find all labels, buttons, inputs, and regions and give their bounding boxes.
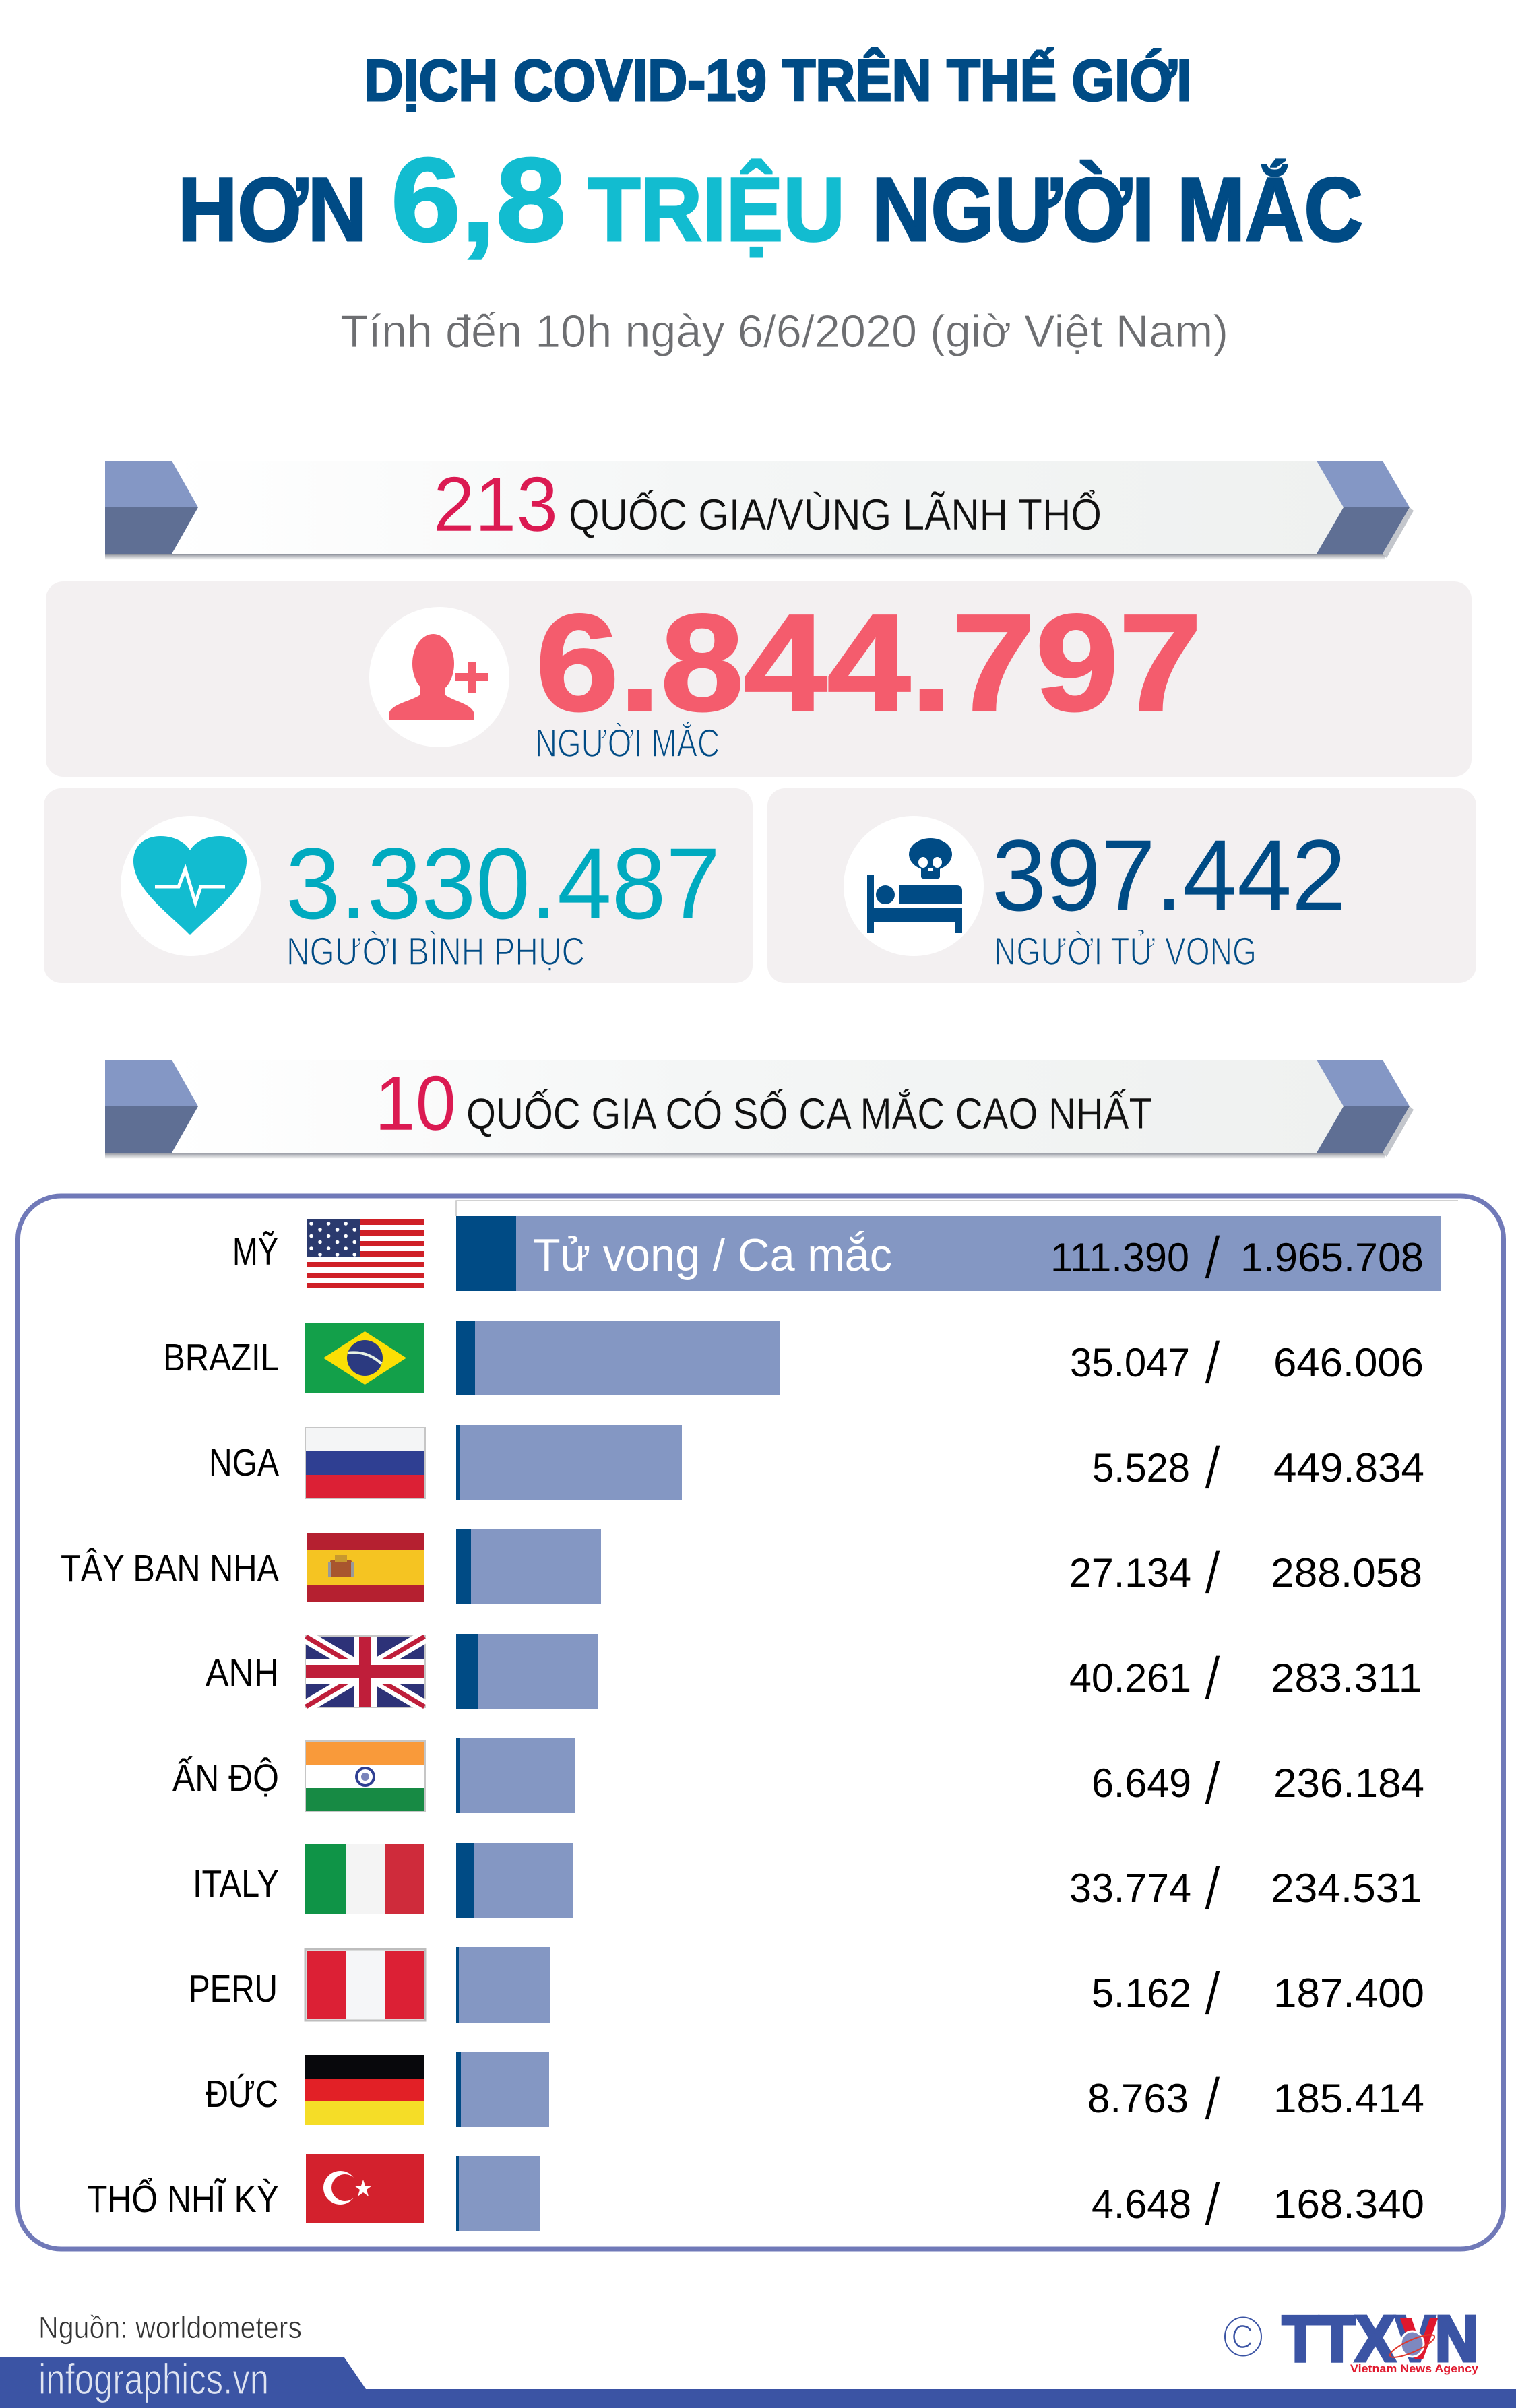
values: Turkey <box>1092 2171 1424 2238</box>
headline: 6,8 <box>391 134 566 266</box>
row: Peru: PERU <box>189 1967 278 2010</box>
values: Spain: 288.058 <box>1271 1550 1422 1595</box>
panel: deaths <box>767 788 1476 983</box>
values: Italy: 234.531 <box>1271 1866 1422 1911</box>
panel: cases <box>46 581 1472 777</box>
icon: copyright <box>1225 2318 1261 2355</box>
banner: top 10 countries: QUỐC GIA CÓ SỐ CA MẮC CAO NHẤT <box>466 1089 1152 1138</box>
title: top line: DỊCH COVID-19 TRÊN THẾ GIỚI <box>364 49 1192 113</box>
banner: 213 territories: QUỐC GIA/VÙNG LÃNH THỔ <box>569 490 1102 539</box>
row: Italy: ITALY <box>193 1862 279 1905</box>
values: USA: 111.390 <box>1050 1235 1189 1280</box>
flag: Brazil <box>305 1323 424 1393</box>
values: USA: / <box>1205 1224 1221 1291</box>
bar: Spain <box>456 1529 601 1604</box>
values: Italy: / <box>1205 1855 1221 1922</box>
row: USA <box>232 1216 1441 1291</box>
icon: skull and bed <box>844 816 984 956</box>
values: Peru: / <box>1205 1960 1221 2027</box>
values: Turkey: / <box>1205 2171 1221 2238</box>
row: India: ẤN ĐỘ <box>172 1756 279 1800</box>
row: Russia: NGA <box>209 1441 279 1484</box>
row: Russia <box>209 1425 1424 1501</box>
row: USA: MỸ <box>232 1230 278 1273</box>
row: UK <box>206 1634 1422 1711</box>
logo: TTXVN: TTXVN <box>1282 2303 1478 2375</box>
row: Turkey <box>87 2154 1424 2238</box>
row: Italy <box>193 1843 1422 1922</box>
values: Brazil: / <box>1205 1329 1221 1396</box>
values: Germany: 8.763 <box>1087 2076 1189 2121</box>
headline: NGƯỜI MẮC <box>872 159 1363 260</box>
values: Italy <box>1069 1855 1422 1922</box>
row: India <box>172 1738 1424 1816</box>
row: Brazil <box>163 1321 1424 1396</box>
flag: Russia <box>305 1428 425 1498</box>
values: Brazil: 646.006 <box>1273 1340 1424 1385</box>
number: cases: 6.844.797 <box>536 586 1202 740</box>
values: Germany: / <box>1205 2065 1221 2132</box>
icon: person plus <box>369 607 509 747</box>
values: USA: 1.965.708 <box>1240 1235 1424 1280</box>
number: deaths: 397.442 <box>992 819 1346 932</box>
values: Brazil: 35.047 <box>1070 1340 1190 1385</box>
number: recovered: 3.330.487 <box>286 827 720 940</box>
bar: Peru <box>456 1947 550 2023</box>
panel: recovered <box>44 788 753 983</box>
values: Peru <box>1092 1960 1424 2027</box>
flag: Germany <box>305 2055 424 2125</box>
values: India <box>1092 1750 1424 1816</box>
banner: 213 territories <box>105 461 1414 560</box>
label: deaths: NGƯỜI TỬ VONG <box>994 930 1257 974</box>
panel: top 10 table <box>18 1196 1504 2249</box>
flag: Spain <box>307 1533 424 1602</box>
values: Peru: 187.400 <box>1273 1971 1424 2016</box>
row: Germany: ĐỨC <box>206 2072 278 2116</box>
row: Peru <box>189 1947 1424 2027</box>
values: Russia: 5.528 <box>1092 1445 1190 1490</box>
values: Brazil <box>1070 1329 1424 1396</box>
bar: UK <box>456 1634 598 1709</box>
values: Germany: 185.414 <box>1273 2076 1424 2121</box>
row: Turkey: THỔ NHĨ KỲ <box>87 2177 279 2221</box>
row: Spain <box>61 1529 1422 1606</box>
flag: Peru <box>305 1949 425 2021</box>
legend label: Tử vong / Ca mắc <box>533 1230 892 1281</box>
values: Spain: / <box>1205 1540 1221 1606</box>
label: cases: NGƯỜI MẮC <box>535 722 720 765</box>
banner: top 10 countries <box>105 1060 1414 1159</box>
row: Brazil: BRAZIL <box>163 1336 279 1379</box>
values: USA <box>1050 1224 1424 1291</box>
values: UK: 40.261 <box>1069 1655 1191 1701</box>
row: Germany <box>206 2052 1424 2132</box>
values: Italy: 33.774 <box>1069 1866 1191 1911</box>
values: Russia: / <box>1205 1434 1221 1501</box>
headline: TRIỆU <box>588 160 845 260</box>
label: recovered: NGƯỜI BÌNH PHỤC <box>286 930 585 974</box>
values: India: 236.184 <box>1273 1761 1424 1806</box>
values: India: 6.649 <box>1092 1761 1191 1806</box>
values: Germany <box>1087 2065 1424 2132</box>
bar: Italy <box>456 1843 573 1918</box>
flag: Turkey <box>306 2154 424 2223</box>
values: Russia <box>1092 1434 1424 1501</box>
values: UK: / <box>1205 1645 1221 1711</box>
row: Spain: TÂY BAN NHA <box>61 1547 279 1590</box>
bar: Germany <box>456 2052 549 2127</box>
icon: heart pulse <box>121 816 261 956</box>
bar: Russia <box>456 1425 682 1500</box>
subtitle: date: Tính đến 10h ngày 6/6/2020 (giờ Việt Nam) <box>340 306 1228 357</box>
bar: India <box>456 1738 575 1813</box>
headline: HƠN <box>178 160 367 260</box>
bar: USA <box>456 1216 1441 1291</box>
flag: Italy <box>305 1844 424 1914</box>
values: UK: 283.311 <box>1271 1655 1422 1701</box>
row: UK: ANH <box>206 1651 279 1694</box>
values: India: / <box>1205 1750 1221 1816</box>
logo: TTXVN: Vietnam News Agency <box>1350 2362 1479 2375</box>
values: Turkey: 4.648 <box>1092 2182 1191 2227</box>
values: UK <box>1069 1645 1422 1711</box>
source note: Nguồn: worldometers <box>38 2310 302 2345</box>
footer band: infographics.vn <box>38 2355 269 2403</box>
footer band <box>0 2355 1516 2408</box>
banner: 213 territories: 213 <box>433 462 558 548</box>
flag: UK <box>305 1636 425 1707</box>
bar: Turkey <box>456 2156 540 2231</box>
values: Russia: 449.834 <box>1273 1445 1424 1490</box>
values: Spain <box>1069 1540 1422 1606</box>
bar: Brazil <box>456 1321 780 1395</box>
values: Spain: 27.134 <box>1069 1550 1191 1595</box>
values: Turkey: 168.340 <box>1273 2182 1424 2227</box>
headline <box>178 134 1363 266</box>
values: Peru: 5.162 <box>1092 1971 1191 2016</box>
flag: USA <box>307 1219 424 1288</box>
banner: top 10 countries: 10 <box>375 1060 456 1147</box>
flag: India <box>305 1741 425 1812</box>
